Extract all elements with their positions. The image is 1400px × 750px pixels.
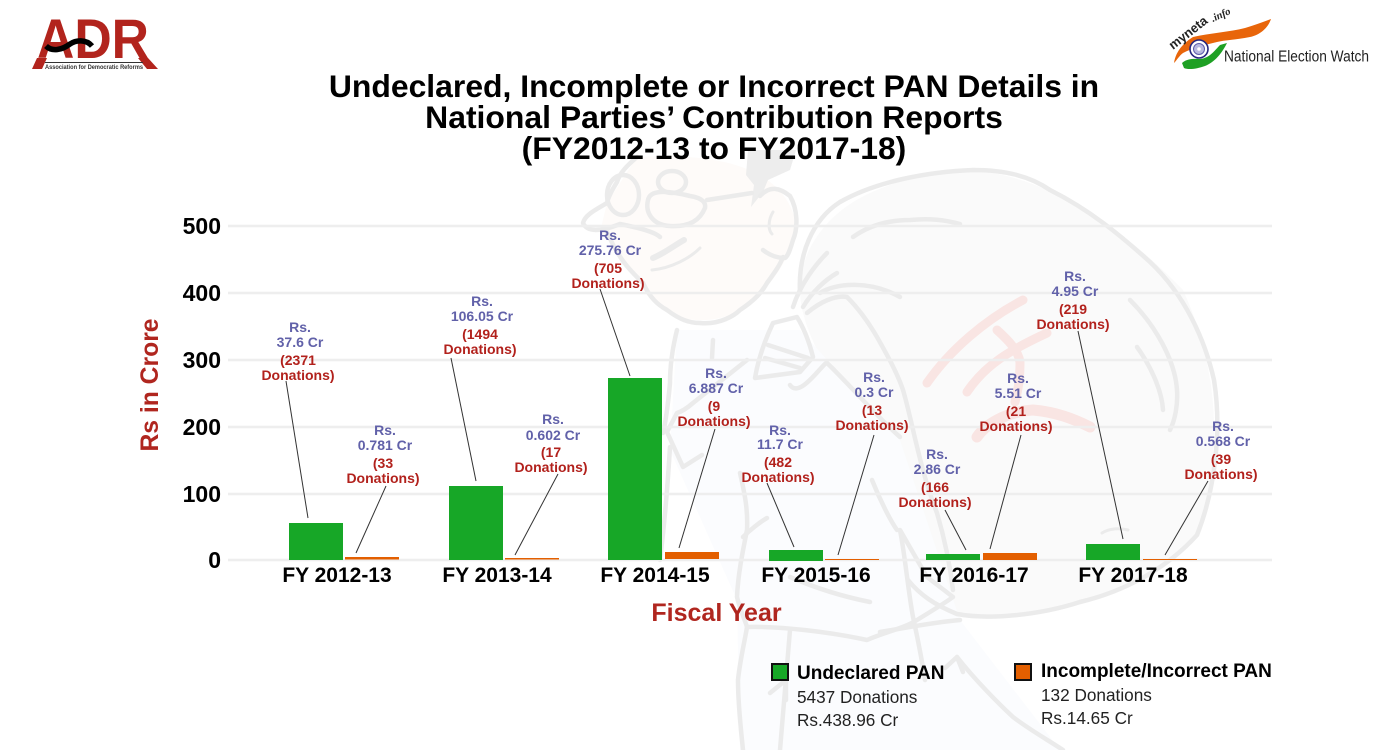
value labels <box>261 227 1258 510</box>
value labels: (13 <box>862 402 882 418</box>
rupee symbol in sack <box>927 300 1090 437</box>
value labels: 2.86 Cr <box>914 461 961 477</box>
x axis labels: FY 2016-17 <box>919 564 1029 587</box>
value labels: Donations) <box>261 367 335 383</box>
value labels: Donations) <box>571 275 645 291</box>
value labels: Donations) <box>514 459 588 475</box>
value labels: (482 <box>764 454 792 470</box>
title: (FY2012-13 to FY2017-18) <box>522 130 906 166</box>
legend: undeclared PAN: Rs.438.96 Cr <box>797 710 898 730</box>
value labels: (705 <box>594 260 622 276</box>
value labels: Rs. <box>863 369 885 385</box>
title <box>329 68 1099 166</box>
legend: undeclared PAN: 5437 Donations <box>797 687 917 707</box>
value labels: (166 <box>921 479 949 495</box>
value labels: 11.7 Cr <box>757 436 804 452</box>
logo: myneta.info National Election Watch <box>1166 6 1369 69</box>
logo: ADR: Association for Democratic Reforms <box>45 64 143 71</box>
value labels: Rs. <box>1007 370 1029 386</box>
x axis labels: FY 2014-15 <box>600 564 710 587</box>
value labels: 0.568 Cr <box>1196 433 1251 449</box>
x axis labels: FY 2013-14 <box>442 564 552 587</box>
y axis labels <box>183 213 221 573</box>
value labels: (21 <box>1006 403 1026 419</box>
value labels: Rs. <box>1064 268 1086 284</box>
value labels: Rs. <box>769 422 791 438</box>
value labels: (2371 <box>280 352 316 368</box>
legend: incomplete or incorrect PAN: 132 Donations <box>1041 685 1152 705</box>
value labels: (39 <box>1211 451 1231 467</box>
logo: myneta.info National Election Watch: myneta <box>1166 12 1211 52</box>
leader lines <box>286 289 1208 555</box>
y axis labels: 400 <box>183 280 221 306</box>
value labels: 106.05 Cr <box>451 308 514 324</box>
value labels: Donations) <box>346 470 420 486</box>
value labels: 275.76 Cr <box>579 242 642 258</box>
legend: undeclared PAN: Undeclared PAN <box>797 663 944 684</box>
legend: incomplete or incorrect PAN: Incomplete/Incorrect PAN <box>1041 661 1272 682</box>
value labels: (219 <box>1059 301 1087 317</box>
value labels: Donations) <box>1184 466 1258 482</box>
value labels: Rs. <box>599 227 621 243</box>
legend: incomplete or incorrect PAN <box>1014 661 1272 728</box>
value labels: Rs. <box>542 411 564 427</box>
value labels: Rs. <box>471 293 493 309</box>
legend: undeclared PAN <box>771 663 944 730</box>
title: Undeclared, Incomplete or Incorrect PAN Details in <box>329 68 1099 104</box>
x axis title: Fiscal Year <box>651 599 782 627</box>
title: National Parties’ Contribution Reports <box>425 99 1003 135</box>
value labels: Rs. <box>374 422 396 438</box>
logo: myneta.info National Election Watch: .info <box>1210 6 1233 25</box>
value labels: 5.51 Cr <box>995 385 1042 401</box>
value labels: Donations) <box>677 413 751 429</box>
bars <box>289 378 1197 561</box>
value labels: (33 <box>373 455 393 471</box>
value labels: 0.781 Cr <box>358 437 413 453</box>
y axis labels: 200 <box>183 414 221 440</box>
value labels: Rs. <box>1212 418 1234 434</box>
value labels: 0.3 Cr <box>855 384 894 400</box>
value labels: Donations) <box>979 418 1053 434</box>
value labels: (17 <box>541 444 561 460</box>
y axis labels: 300 <box>183 347 221 373</box>
value labels: Rs. <box>705 365 727 381</box>
logo: myneta.info National Election Watch: National Election Watch <box>1224 48 1369 66</box>
value labels: Donations) <box>835 417 909 433</box>
value labels: Donations) <box>898 494 972 510</box>
x axis labels: FY 2015-16 <box>761 564 871 587</box>
value labels: (9 <box>708 398 720 414</box>
y axis labels: 0 <box>208 547 221 573</box>
x axis labels: FY 2012-13 <box>282 564 392 587</box>
value labels: (1494 <box>462 326 498 342</box>
value labels: 4.95 Cr <box>1052 283 1099 299</box>
x axis labels: FY 2017-18 <box>1078 564 1188 587</box>
y axis labels: 100 <box>183 481 221 507</box>
value labels: Donations) <box>741 469 815 485</box>
logo: ADR: ADR <box>37 7 149 70</box>
value labels: Rs. <box>926 446 948 462</box>
value labels: Donations) <box>1036 316 1110 332</box>
value labels: Donations) <box>443 341 517 357</box>
y axis labels: 500 <box>183 213 221 239</box>
value labels: 6.887 Cr <box>689 380 744 396</box>
legend: incomplete or incorrect PAN: Rs.14.65 Cr <box>1041 708 1133 728</box>
x axis labels <box>282 564 1188 587</box>
value labels: 37.6 Cr <box>277 334 324 350</box>
value labels: Rs. <box>289 319 311 335</box>
y axis title: Rs in Crore <box>137 318 164 452</box>
value labels: 0.602 Cr <box>526 427 581 443</box>
